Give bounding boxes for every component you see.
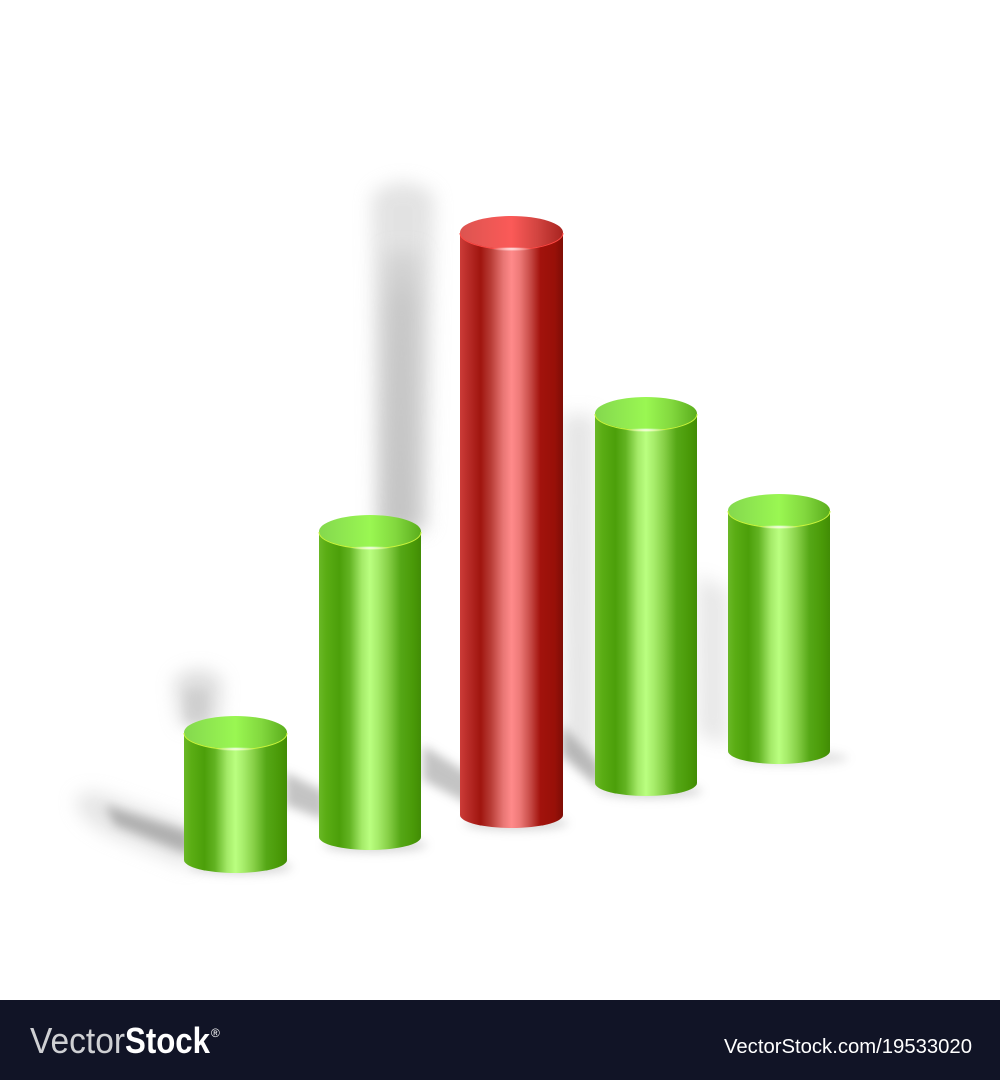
footer logo: VectorStock xyxy=(30,1020,220,1061)
footer band xyxy=(0,1000,1000,1080)
bar 3: tallest red cylinder xyxy=(460,216,563,828)
bar 5: medium-short green cylinder xyxy=(728,494,830,764)
footer logo: VectorStock: ® xyxy=(211,1026,220,1040)
shadows cast by the cylinders xyxy=(76,182,848,874)
footer image id: VectorStock.com/19533020 xyxy=(724,1036,972,1058)
footer logo: VectorStock: Stock xyxy=(125,1020,211,1061)
bar 4: tall green cylinder xyxy=(595,397,697,796)
footer logo: VectorStock: Vector xyxy=(30,1020,125,1061)
bar 2: medium green cylinder xyxy=(319,515,421,850)
bar 1: short green cylinder xyxy=(184,716,287,873)
